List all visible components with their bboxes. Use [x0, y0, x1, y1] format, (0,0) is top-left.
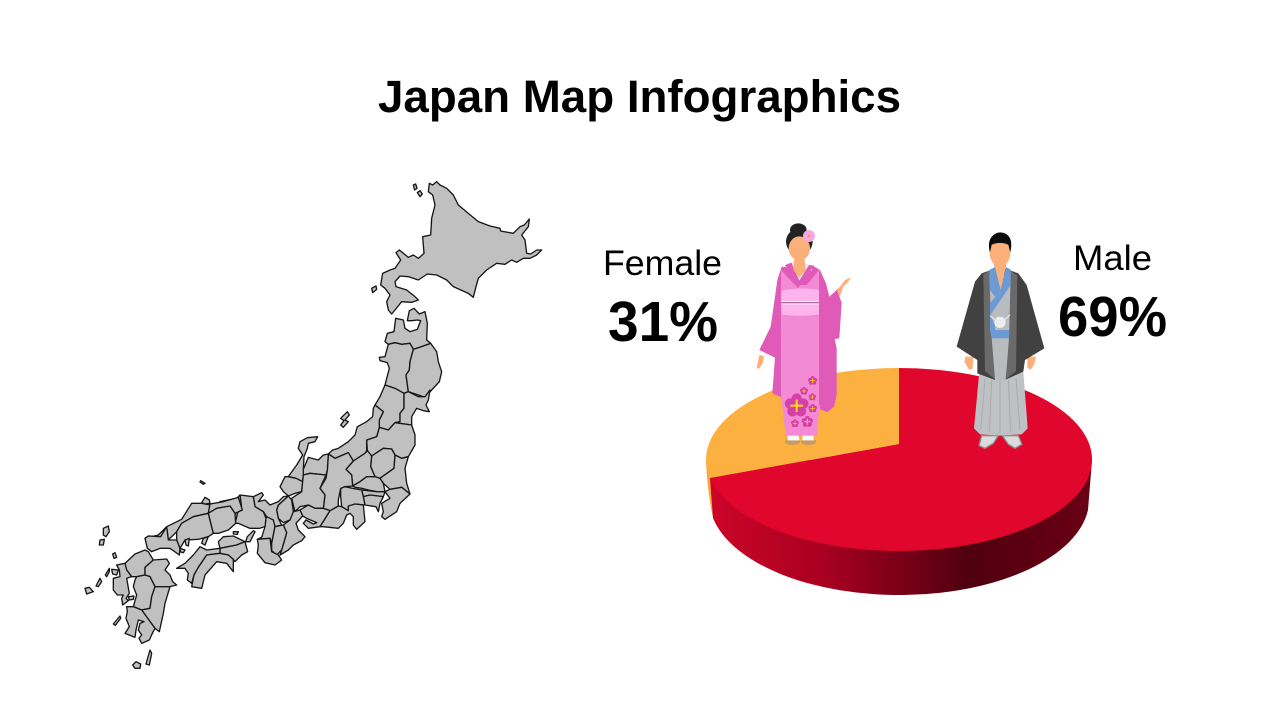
icon: man in hakama [957, 232, 1044, 448]
flowers on kimono [785, 376, 817, 427]
Tohoku [341, 308, 442, 427]
Chubu, Kanto and Kansai [220, 385, 430, 565]
Hokkaido [372, 182, 542, 314]
female label: Female [603, 243, 722, 283]
white crest [990, 315, 1010, 328]
jacket lapels [983, 270, 1017, 379]
blue sash [990, 315, 1009, 338]
sandals [785, 436, 816, 445]
map of Japan [85, 182, 542, 668]
collar [785, 262, 814, 288]
male label: 69% [1058, 285, 1167, 349]
kimono front [781, 270, 819, 436]
haori jacket [957, 267, 1044, 380]
female label [603, 243, 722, 354]
female slice [706, 368, 899, 478]
face [793, 257, 806, 278]
female label: 31% [608, 290, 718, 354]
hands [757, 355, 764, 369]
male slice [710, 368, 1092, 551]
title: Japan Map Infographics [378, 71, 901, 122]
sandals [979, 436, 1022, 448]
Chugoku, Shikoku and Kyushu [85, 481, 255, 668]
blue collar right [990, 267, 1011, 316]
left sleeve and skirt edge [759, 267, 820, 405]
hair [989, 232, 1011, 252]
obi belt [781, 289, 819, 316]
3D pie chart [706, 368, 1092, 595]
hair flower [803, 230, 815, 242]
right sleeve and skirt edge [812, 265, 842, 412]
male label: Male [1073, 238, 1152, 278]
neck and face [993, 263, 1007, 290]
blue collar left [989, 267, 1001, 297]
hakama trousers [974, 372, 1028, 436]
hair and bun [786, 223, 813, 255]
male label [1058, 238, 1167, 349]
icon: woman in kimono [757, 223, 851, 445]
inner kimono [989, 275, 1011, 380]
pie side wall [706, 460, 1092, 595]
orange sliver on the side [706, 460, 713, 518]
hands [965, 357, 973, 370]
